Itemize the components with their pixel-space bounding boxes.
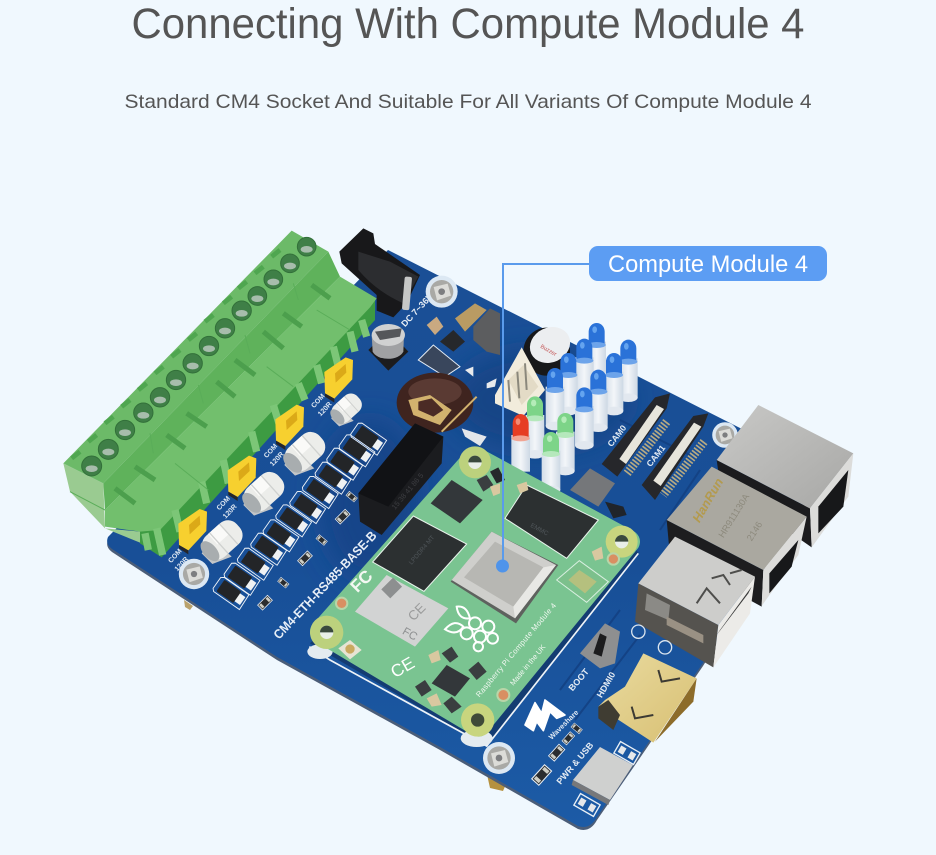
terminal labels: COM (216, 495, 232, 512)
module PCB (322, 458, 628, 725)
blue LEDs (546, 323, 638, 450)
connector labels (555, 666, 617, 786)
RJ45 bottom: HR911130A (717, 492, 752, 539)
title: Connecting With Compute Module 4 (132, 0, 804, 48)
CAM0 connector (602, 393, 670, 477)
RAM chip: LPDDR4 MT (408, 534, 436, 566)
eMMC chip (505, 485, 598, 558)
CAM labels: CAM0 (605, 423, 628, 449)
RJ45 bottom: HanRun (690, 476, 726, 525)
connector labels: HDMI0 (595, 670, 617, 699)
buzzer (523, 321, 576, 376)
WiFi module shield: CE (405, 600, 429, 624)
RS485 jumpers (178, 357, 353, 554)
top passives (477, 467, 603, 561)
Waveshare logo: Waveshare (547, 708, 580, 741)
CAM1 connector (642, 413, 708, 500)
slide switch (580, 623, 620, 668)
FCC mark: FC (346, 565, 377, 596)
module shadow and standoffs (307, 463, 638, 747)
product photo: CM4 base board (63, 228, 853, 830)
terminal labels: COM (263, 443, 279, 460)
copper test pads (336, 553, 619, 701)
WiFi module shield (355, 575, 448, 647)
terminal labels: COM (167, 548, 184, 565)
callout anchor dot (496, 560, 509, 572)
CE mark: CE (387, 652, 418, 682)
terminal labels (167, 393, 334, 573)
terminal block (63, 231, 377, 557)
subtitle: Standard CM4 Socket And Suitable For All Variants Of Compute Module 4 (124, 91, 812, 113)
ethernet PHY chip (431, 480, 483, 523)
RAM chip (373, 516, 467, 591)
terminal labels: COM (310, 393, 327, 410)
left half components (63, 228, 500, 610)
connector labels: PWR & USB (555, 740, 596, 786)
terminal tabs (115, 285, 330, 503)
callout leader line (503, 264, 590, 566)
mounting holes (310, 446, 638, 737)
electrolytic capacitor (368, 324, 408, 371)
transformer block (358, 423, 443, 535)
U.FL antenna connector (338, 640, 362, 659)
Waveshare logo (525, 700, 580, 741)
screw top (426, 276, 458, 308)
Raspberry Pi logo (445, 606, 498, 651)
RJ45 top (717, 405, 853, 547)
green and red LEDs (511, 396, 575, 494)
USB-C connector (572, 742, 640, 816)
board name label: CM4-ETH-RS485-BASE-B (270, 528, 380, 642)
terminal labels: 120R (222, 503, 239, 520)
standoff legs (184, 600, 507, 791)
HDMI connector (598, 653, 697, 743)
connector labels: BOOT (567, 666, 591, 693)
inductor (455, 303, 500, 355)
screw bottom (483, 742, 515, 774)
gas discharge tubes (196, 390, 366, 566)
SoC heat spreader (451, 532, 558, 623)
RJ45 bottom: 2146 (745, 520, 764, 543)
module silkscreen text: Made in the UK (508, 643, 547, 687)
CAM labels (605, 423, 667, 469)
DC label: DC 7~36V (399, 291, 435, 329)
buzzer: Buzzer (539, 344, 557, 358)
transformer block: 15 38 41 86 5 (390, 471, 425, 511)
WiFi module shield: FC (400, 626, 419, 643)
white header connector (495, 347, 545, 416)
USB dual port (632, 537, 755, 667)
small ICs (418, 317, 497, 388)
callout: Compute Module 4 (589, 246, 827, 281)
small ICs bottom (532, 723, 582, 785)
terminal fins (138, 298, 375, 557)
screw near RJ45 (712, 422, 738, 448)
lower PMIC and passives (415, 647, 487, 713)
RJ45 bottom (667, 467, 807, 607)
screw left (179, 559, 209, 589)
callout: Compute Module 4: Compute Module 4 (608, 251, 808, 278)
eMMC chip: EMMC (529, 522, 550, 538)
terminal screw holes (82, 237, 316, 476)
terminal labels: 120R (317, 401, 334, 418)
CAM labels: CAM1 (644, 443, 667, 469)
Compute Module 4 (307, 446, 638, 747)
module silkscreen text: Raspberry Pi Compute Module 4 (474, 601, 558, 699)
QR code patch (557, 561, 608, 602)
terminal labels: 120R (174, 556, 190, 573)
small SMD parts (258, 491, 357, 610)
DC jack (339, 228, 420, 317)
coin cell holder (397, 373, 487, 446)
carrier board PCB (107, 250, 825, 830)
right half components (495, 321, 853, 816)
TVS diode array (212, 421, 387, 610)
terminal labels: 120R (269, 451, 286, 468)
grey inductor (570, 468, 627, 518)
